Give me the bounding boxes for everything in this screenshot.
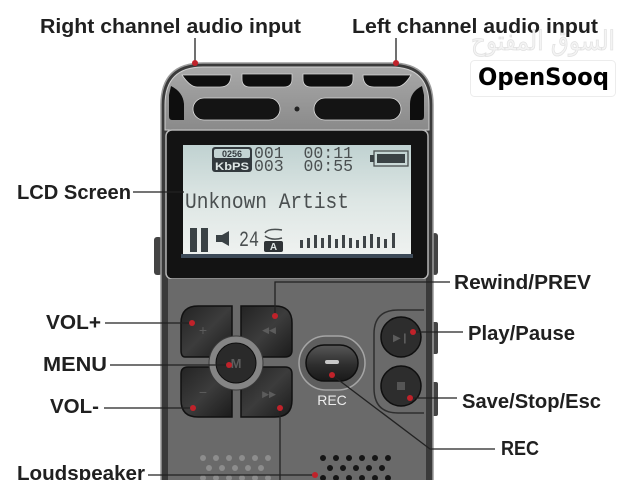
callout: save stop esc: Save/Stop/Esc bbox=[462, 391, 601, 413]
volume number: 24 bbox=[239, 228, 259, 253]
callout: loudspeaker bbox=[17, 463, 318, 480]
speaker holes right bbox=[320, 455, 391, 480]
top microphone slots bbox=[182, 74, 411, 87]
icon: voice recorder device bbox=[154, 63, 438, 480]
callout: play pause bbox=[410, 323, 575, 345]
callout: rewind bbox=[272, 272, 592, 319]
grille section bbox=[165, 67, 429, 130]
fast forward button bbox=[241, 367, 292, 417]
callout: VOL+ bbox=[46, 312, 195, 334]
rewind button bbox=[241, 306, 292, 357]
fast forward button: ▶▶ bbox=[262, 389, 276, 399]
speaker holes left bbox=[200, 455, 271, 480]
bitrate badge: 0256 bbox=[222, 149, 242, 159]
icon: battery bbox=[370, 151, 408, 166]
callout: VOL- bbox=[50, 396, 196, 418]
icon: pause bbox=[190, 228, 208, 252]
callout: left channel audio input: Left channel audio input bbox=[352, 16, 598, 38]
VOL- button: − bbox=[199, 384, 207, 400]
VOL- button bbox=[181, 367, 232, 417]
play and stop surround bbox=[374, 310, 424, 413]
large microphone slots bbox=[193, 98, 401, 120]
bitrate badge: KbPS bbox=[215, 161, 249, 173]
callout: rewind: Rewind/PREV bbox=[454, 272, 592, 294]
REC button bbox=[299, 336, 365, 408]
control panel bbox=[168, 279, 426, 480]
icon: repeat mode: A bbox=[270, 242, 277, 253]
level meter bbox=[300, 233, 395, 248]
device body bbox=[161, 63, 433, 480]
callout: menu: MENU bbox=[43, 354, 107, 376]
stop button bbox=[381, 366, 421, 406]
menu button bbox=[209, 336, 263, 390]
menu button: M bbox=[231, 356, 241, 371]
logo: OpenSooq: OpenSooq bbox=[478, 63, 609, 91]
VOL+ button: + bbox=[199, 322, 207, 338]
callout: REC bbox=[329, 372, 539, 460]
play pause button: ▶❙ bbox=[393, 333, 409, 344]
rewind button: ◀◀ bbox=[262, 325, 276, 335]
LCD screen: 003 00:55 bbox=[254, 158, 353, 177]
side buttons bbox=[154, 233, 438, 416]
track and time: 001 00:11 bbox=[254, 145, 353, 164]
watermark: Arabic brand: السوق المفتوح bbox=[471, 26, 615, 57]
callout: REC: REC bbox=[501, 438, 539, 460]
icon: volume bbox=[216, 231, 229, 246]
callout: fast forward leader bbox=[277, 405, 283, 480]
callout: LCD screen: LCD Screen bbox=[17, 182, 131, 204]
callout: VOL-: VOL- bbox=[50, 396, 99, 418]
track artist: Unknown Artist bbox=[185, 190, 349, 215]
LCD screen bbox=[181, 145, 413, 258]
callout: left channel audio input bbox=[352, 16, 598, 66]
callout: VOL+: VOL+ bbox=[46, 312, 101, 334]
callout: right channel audio input bbox=[40, 16, 301, 66]
callout: menu bbox=[43, 354, 232, 376]
side microphone slots bbox=[169, 86, 424, 120]
REC button: REC bbox=[317, 392, 347, 408]
icon: repeat mode bbox=[264, 229, 283, 253]
screen bezel bbox=[166, 130, 428, 279]
play pause button bbox=[381, 317, 421, 357]
callout: right channel audio input: Right channel audio input bbox=[40, 16, 301, 38]
callout: play pause: Play/Pause bbox=[468, 323, 575, 345]
mic hole bbox=[294, 106, 300, 112]
bitrate badge bbox=[212, 147, 252, 173]
VOL+ button bbox=[181, 306, 232, 357]
